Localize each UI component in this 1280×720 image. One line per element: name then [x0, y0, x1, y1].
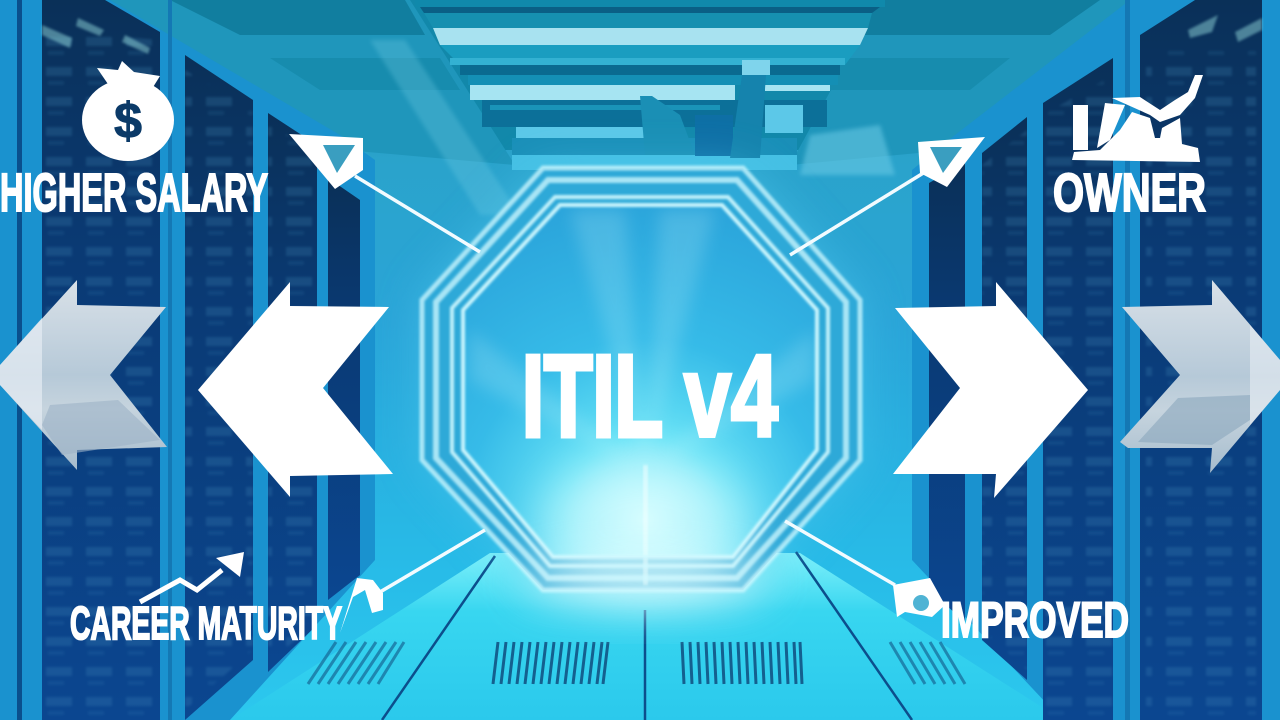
connector: lower right [785, 521, 945, 617]
floor vents [308, 642, 965, 684]
title: ITIL v4: v4 [684, 331, 778, 461]
arrow: right inner white [893, 282, 1088, 498]
label: career maturity: CAREER MATURITY [70, 597, 342, 649]
central glowing octagon [422, 168, 860, 610]
left server racks [0, 0, 375, 720]
icon: growth chart [1072, 75, 1203, 162]
arrow: left inner white [198, 282, 393, 497]
light rays [470, 210, 815, 470]
floor [230, 552, 1062, 720]
arrow: right outer translucent [1120, 280, 1280, 473]
connector: upper left arrow [289, 134, 480, 252]
label: improved: IMPROVED [941, 592, 1129, 648]
icon: money bag [82, 61, 174, 161]
label: owner: OWNER [1053, 163, 1206, 223]
title: ITIL v4: ITIL [522, 331, 663, 461]
right server racks [912, 0, 1280, 720]
icon: money bag: $ [114, 93, 142, 149]
connector: upper right arrow [790, 137, 985, 255]
icon: rising trend arrow [140, 552, 244, 602]
label: higher salary: HIGHER SALARY [0, 163, 268, 223]
floor seams [382, 552, 912, 720]
octagon rings [422, 168, 860, 590]
connector: lower left [340, 530, 485, 633]
arrow: left outer translucent [0, 280, 167, 470]
